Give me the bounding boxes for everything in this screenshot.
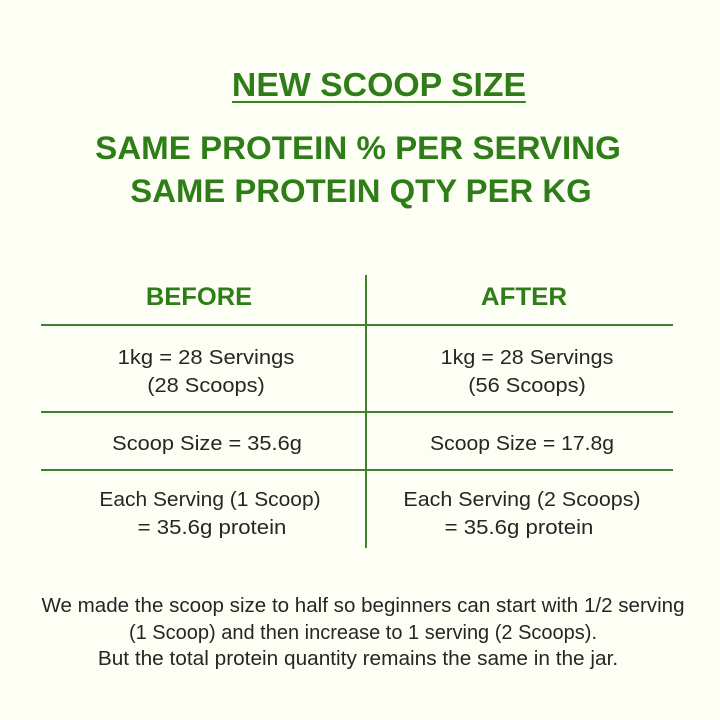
after scoop size: Scoop Size = 17.8g — [430, 433, 614, 455]
before each serving: Each Serving (1 Scoop) — [99, 489, 321, 511]
title: NEW SCOOP SIZE — [232, 66, 526, 103]
after each serving: Each Serving (2 Scoops) — [403, 489, 641, 511]
subtitle — [95, 130, 621, 209]
after servings: 1kg = 28 Servings — [441, 347, 613, 369]
before header: BEFORE — [146, 283, 252, 311]
subtitle: SAME PROTEIN % PER SERVING — [95, 130, 621, 166]
comparison table — [41, 275, 673, 548]
after servings: (56 Scoops) — [468, 375, 586, 397]
after each serving: = 35.6g protein — [444, 517, 593, 539]
before servings: 1kg = 28 Servings — [118, 347, 294, 369]
after header: AFTER — [480, 283, 567, 311]
before scoop size: Scoop Size = 35.6g — [112, 433, 302, 455]
explanatory note — [41, 595, 684, 670]
explanatory note: (1 Scoop) and then increase to 1 serving (2 Scoops). — [129, 622, 597, 644]
after each serving — [403, 489, 641, 539]
subtitle: SAME PROTEIN QTY PER KG — [130, 173, 592, 209]
explanatory note: We made the scoop size to half so beginners can start with 1/2 serving — [41, 595, 684, 617]
before servings — [118, 347, 294, 397]
before each serving — [99, 489, 321, 539]
before each serving: = 35.6g protein — [137, 517, 286, 539]
after servings — [441, 347, 613, 397]
explanatory note: But the total protein quantity remains the same in the jar. — [98, 648, 618, 670]
before servings: (28 Scoops) — [147, 375, 265, 397]
